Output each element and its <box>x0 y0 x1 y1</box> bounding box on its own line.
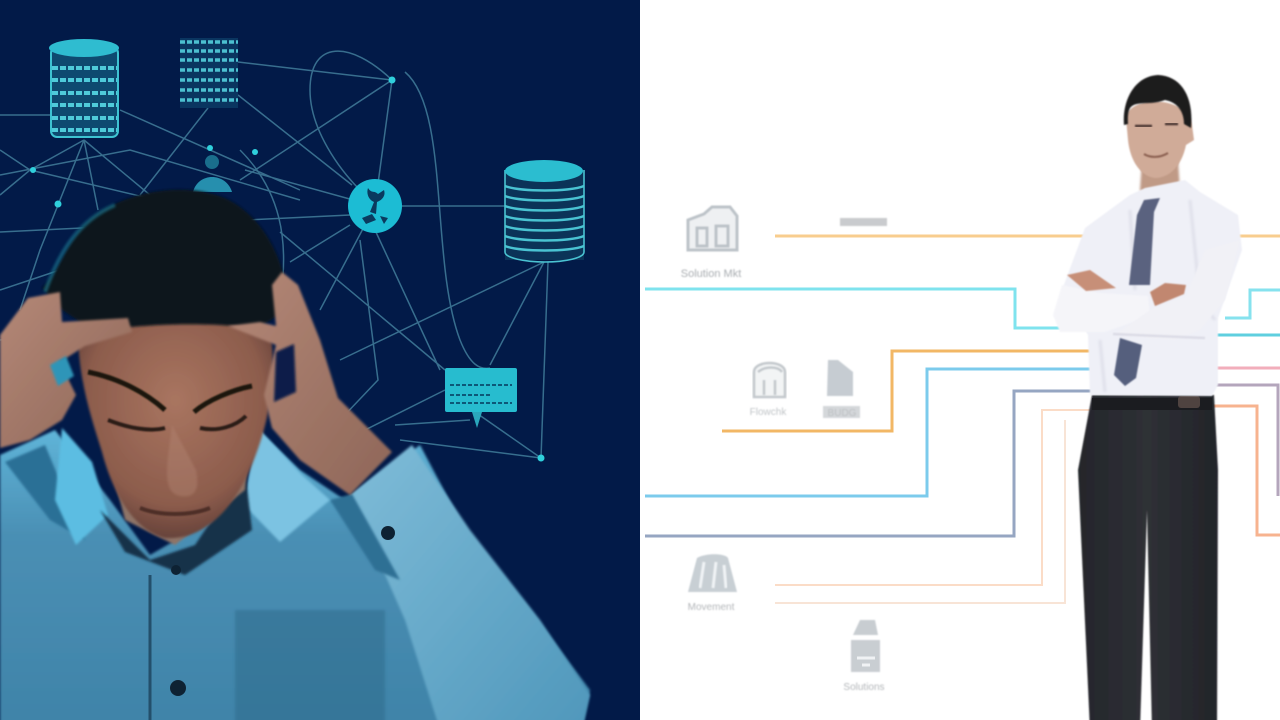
shirt fold shadow <box>5 445 85 540</box>
icon group: box with label <box>843 620 885 693</box>
neck <box>1140 160 1180 205</box>
icon group: building with label <box>681 207 741 280</box>
shirt shading <box>1100 200 1215 392</box>
eyes and brows <box>88 372 252 412</box>
pocket shadow <box>235 610 385 720</box>
icon group: building with label: Solution Mkt <box>681 268 741 280</box>
icon group: clipboard with label: BUDG <box>828 408 857 419</box>
face <box>78 309 273 538</box>
person: confident businessman with crossed arms <box>1053 75 1242 720</box>
facial features <box>1135 124 1178 126</box>
pipeline lines <box>645 236 1280 603</box>
panel: left dark network background <box>0 0 640 720</box>
icon group: box with label: Solutions <box>843 682 885 693</box>
icon: server grid <box>180 38 238 108</box>
shirt buttons <box>170 526 395 696</box>
icon: central hub node <box>348 179 402 233</box>
cuff shadow <box>330 494 400 580</box>
icon: data card <box>445 368 517 428</box>
shirt torso <box>1062 180 1242 396</box>
icon group: lock with label <box>750 363 787 418</box>
person: stressed man holding his head <box>0 190 590 720</box>
neck and chin stubble <box>112 430 250 545</box>
left hand <box>0 292 132 448</box>
icon: large database right <box>505 160 584 262</box>
shirt sleeve <box>350 445 590 720</box>
small grey heading bar <box>840 218 887 226</box>
belt <box>1092 398 1212 410</box>
tie <box>1129 198 1160 285</box>
icon: database top left <box>49 39 119 137</box>
network connection lines <box>0 51 548 458</box>
trousers <box>1078 395 1218 720</box>
icon group: clipboard with label <box>823 360 860 419</box>
right collar <box>244 428 330 542</box>
icon: small person figure <box>193 155 232 192</box>
right hand <box>228 272 392 495</box>
panel: right white pipelines background <box>640 0 1280 720</box>
hair <box>1124 75 1191 128</box>
left collar <box>55 428 108 545</box>
hair <box>42 190 287 332</box>
icon group: lock with label: Flowchk <box>750 407 787 418</box>
crossed arms <box>1053 285 1150 332</box>
shirt body <box>0 430 590 720</box>
hands <box>1067 270 1116 291</box>
head <box>1126 102 1194 178</box>
network nodes <box>30 76 544 462</box>
icon group: shelter with label <box>688 554 737 613</box>
icon group: shelter with label: Movement <box>688 602 735 613</box>
collar shadow and placket <box>100 470 252 575</box>
